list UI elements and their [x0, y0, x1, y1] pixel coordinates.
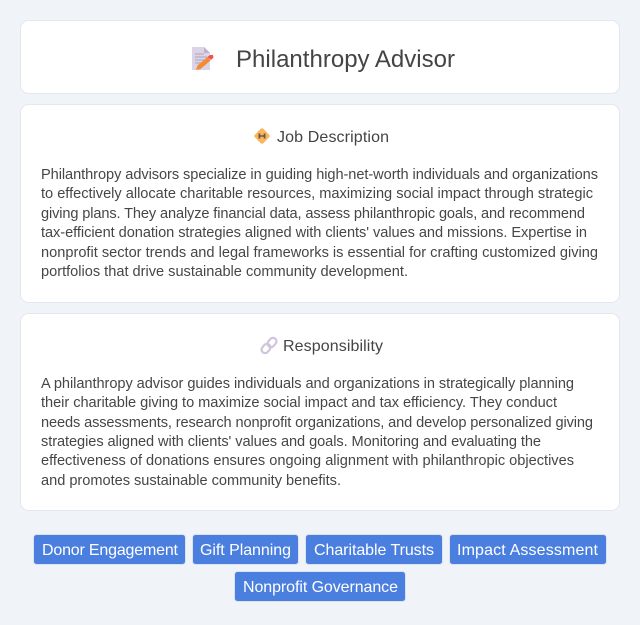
tag: impact assessment: Impact Assessment — [457, 542, 599, 559]
text block: job description: Philanthropy advisors specialize in guiding high-net-worth individuals and organizations — [41, 167, 598, 183]
text block: responsibility: and promotes sustainable community benefits. — [41, 473, 341, 489]
tag: gift planning — [192, 534, 298, 564]
text block: responsibility — [41, 376, 593, 489]
tag: impact assessment — [450, 534, 606, 564]
tag: charitable trusts: Charitable Trusts — [314, 542, 434, 559]
panel: job description — [20, 104, 620, 302]
text block: responsibility: their charitable giving to maximize social impact and tax efficiency. They conduct — [41, 395, 557, 411]
tag: nonprofit governance: Nonprofit Governance — [243, 579, 398, 596]
text block: job description: tax-efficient donation strategies aligned with clients' values and missions. Expertise in — [41, 225, 587, 241]
text block: responsibility: effectiveness of donations ensures ongoing alignment with philanthropic objectives — [41, 453, 574, 469]
tag: charitable trusts — [306, 534, 442, 564]
tag: gift planning: Gift Planning — [200, 542, 291, 559]
text block: job description — [41, 167, 598, 280]
panel: responsibility — [20, 314, 620, 510]
panel: title — [20, 20, 620, 94]
heading: job description: Job Description — [277, 129, 389, 146]
text block: responsibility: needs assessments, research nonprofit organizations, and develop personalized giving — [41, 415, 593, 431]
tag: nonprofit governance — [234, 572, 406, 602]
text block: responsibility: A philanthropy advisor guides individuals and organizations in strategically planning — [41, 376, 574, 392]
tag: donor engagement: Donor Engagement — [42, 542, 179, 559]
text block: job description: nonprofit sector trends and legal frameworks is essential for crafting customized giving — [41, 245, 598, 261]
icon: diamond sign — [254, 128, 270, 144]
heading: title text: Philanthropy Advisor — [236, 46, 455, 73]
icon: chain link — [260, 336, 278, 355]
heading: responsibility: Responsibility — [283, 338, 383, 355]
text block: responsibility: strategies aligned with clients' values and goals. Monitoring and evaluating the — [41, 434, 541, 450]
text block: job description: giving plans. They analyze financial data, assess philanthropic goals, and recommend — [41, 206, 585, 222]
text block: job description: portfolios that drive sustainable community development. — [41, 264, 408, 280]
tag: donor engagement — [34, 534, 186, 564]
text block: job description: to effectively allocate charitable resources, maximizing social impact through strategic — [41, 186, 593, 202]
icon: document with pencil — [192, 47, 214, 70]
